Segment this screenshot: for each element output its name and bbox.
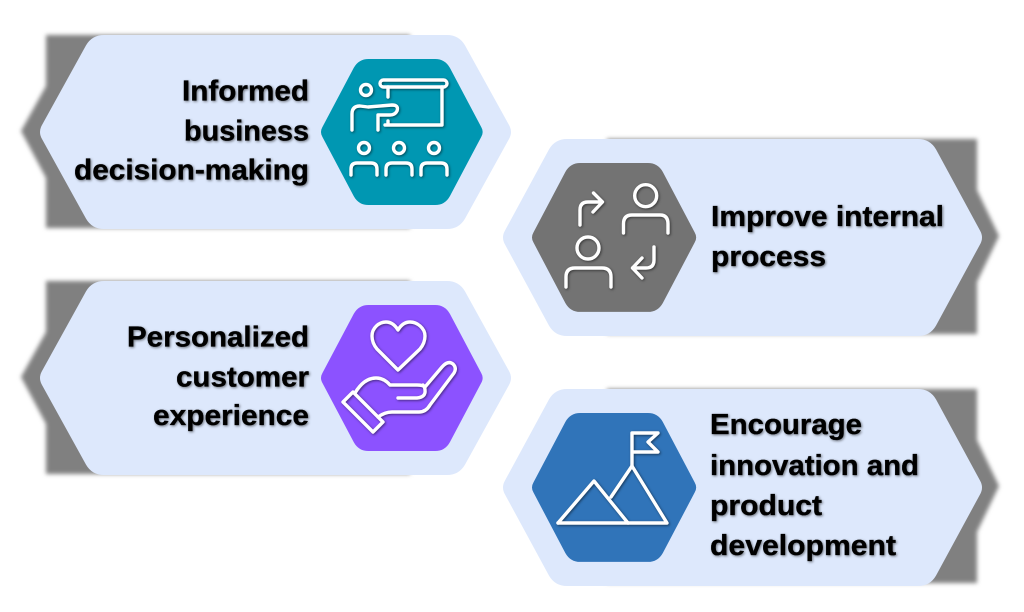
panel text: customer	[176, 362, 309, 394]
panel text: business	[184, 116, 309, 148]
panel text: process	[711, 241, 826, 273]
icon badge: mountain with flag	[532, 413, 696, 562]
icon badge: hand holding heart	[321, 305, 483, 451]
panel: encourage innovation and product development	[503, 389, 999, 586]
panel shadow	[607, 389, 999, 583]
panel background	[40, 281, 511, 475]
panel shadow	[21, 281, 410, 474]
panel text: experience	[153, 400, 309, 432]
panel text: Encourage	[710, 409, 862, 441]
panel text: innovation and	[710, 450, 919, 482]
panel shadow	[21, 35, 410, 228]
icon badge: two people exchanging	[532, 163, 696, 312]
panel: personalized customer experience	[21, 281, 511, 475]
panel text	[711, 201, 944, 273]
panel: improve internal process	[503, 139, 999, 336]
panel text: decision-making	[74, 154, 309, 186]
panel background	[40, 35, 511, 229]
panel: informed business decision-making	[21, 35, 511, 229]
panel text: product	[710, 490, 822, 522]
panel text: Informed	[182, 76, 309, 108]
panel text	[127, 322, 309, 432]
panel text: Personalized	[127, 322, 309, 354]
panel shadow	[607, 139, 999, 334]
panel background	[503, 139, 982, 336]
panel text	[710, 409, 919, 562]
icon badge: presenter and audience	[321, 59, 483, 205]
panel text	[74, 76, 309, 186]
panel text: development	[710, 530, 896, 562]
panel text: Improve internal	[711, 201, 944, 233]
panel background	[503, 389, 982, 586]
